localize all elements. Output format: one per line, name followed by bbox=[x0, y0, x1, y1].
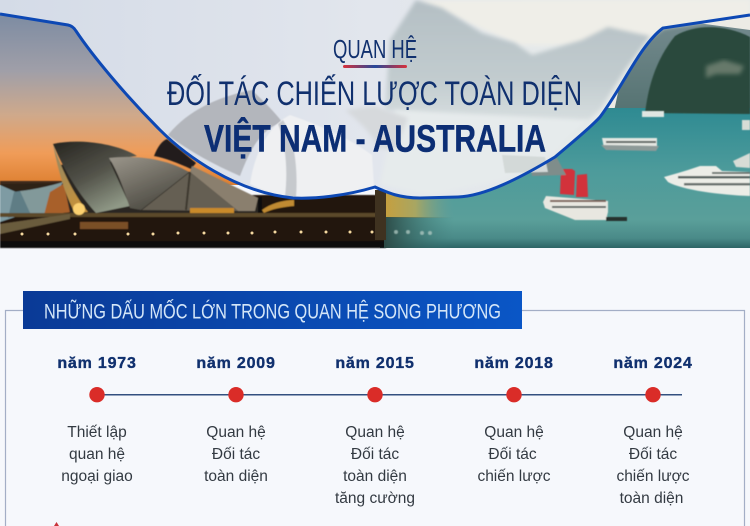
boat: top bbox=[642, 111, 664, 117]
boat: right shore bbox=[742, 120, 750, 130]
photo: pale sky bbox=[0, 0, 750, 130]
milestone 1973: Thiết lập bbox=[67, 424, 127, 441]
milestone 2015: toàn diện bbox=[343, 468, 407, 485]
milestone 2015 bbox=[335, 355, 415, 507]
panel heading bbox=[23, 291, 522, 329]
photo: harbour lights bbox=[20, 230, 374, 236]
milestone 2015: Đối tác bbox=[351, 446, 399, 463]
milestone 2009: Đối tác bbox=[212, 446, 260, 463]
milestone 2009: Quan hệ bbox=[206, 424, 266, 441]
milestone 2024: năm 2024 bbox=[613, 355, 693, 372]
milestone 2024: Quan hệ bbox=[623, 424, 683, 441]
milestone 2018: Quan hệ bbox=[484, 424, 544, 441]
banner photo collage bbox=[0, 0, 750, 248]
blue curve frame bbox=[0, 14, 750, 198]
title line: Việt Nam - Australia: VIỆT NAM - AUSTRALIA bbox=[204, 116, 546, 160]
milestone 2015: Quan hệ bbox=[345, 424, 405, 441]
milestone 2018: năm 2018 bbox=[474, 355, 554, 372]
photo: island cliff bbox=[706, 60, 744, 78]
boat: right cruise bbox=[664, 166, 750, 196]
photo: green island bbox=[645, 27, 750, 114]
bright glazing bbox=[44, 180, 72, 215]
ghost: opera white shells bbox=[250, 115, 374, 197]
title rule bbox=[343, 65, 407, 68]
milestone 2024: chiến lược bbox=[616, 468, 690, 485]
milestone 2018: Đối tác bbox=[488, 446, 537, 463]
milestone 1973 bbox=[57, 355, 137, 485]
photo: golden shoreline bbox=[384, 188, 454, 218]
photo: Sydney Opera House bbox=[0, 139, 386, 248]
ghost: Ha Long mountains bbox=[385, 0, 650, 145]
red marker tip bbox=[54, 522, 59, 526]
milestone 2015: tăng cường bbox=[335, 490, 415, 507]
milestone 2024: toàn diện bbox=[620, 490, 683, 507]
milestone 1973: ngoại giao bbox=[61, 468, 133, 485]
milestone 2018 bbox=[474, 355, 554, 485]
panel: milestones bbox=[6, 291, 744, 526]
ghost: boat on veil bbox=[502, 155, 548, 173]
boats bbox=[530, 111, 750, 221]
panel heading: NHỮNG DẤU MỐC LỚN TRONG QUAN HỆ SONG PHƯƠNG bbox=[44, 300, 501, 324]
boat: far right bbox=[733, 153, 750, 168]
title line: Quan hệ: QUAN HỆ bbox=[333, 34, 417, 64]
photo: water glints bbox=[394, 230, 432, 235]
photo: Sydney sunset sky bbox=[0, 10, 400, 185]
shell backing bbox=[60, 160, 258, 213]
ghost: opera sail bbox=[168, 90, 282, 176]
timeline line bbox=[97, 394, 682, 396]
photo: dark far shore bbox=[384, 217, 454, 248]
milestone 2009: năm 2009 bbox=[196, 355, 276, 372]
photo: Ha Long bay water bbox=[380, 108, 750, 248]
photo: distant mountains right bbox=[610, 20, 750, 130]
title bbox=[167, 34, 582, 160]
milestone 2015: năm 2015 bbox=[335, 355, 415, 372]
ghost: cream sky bbox=[418, 0, 750, 45]
boat: behind frame bbox=[530, 158, 566, 176]
translucent title panel bbox=[0, 0, 750, 198]
milestone 2018: chiến lược bbox=[477, 468, 551, 485]
title line: Đối tác chiến lược toàn diện: ĐỐI TÁC CHIẾN LƯỢC TOÀN DIỆN bbox=[167, 74, 582, 113]
milestone 2009 bbox=[196, 355, 276, 485]
milestone 1973: năm 1973 bbox=[57, 355, 137, 372]
milestone 2024: Đối tác bbox=[629, 446, 677, 463]
ghost: pale haze on water bbox=[380, 110, 590, 195]
milestone 2024 bbox=[613, 355, 693, 507]
milestone 1973: quan hệ bbox=[69, 446, 125, 463]
panel border bbox=[6, 310, 744, 526]
boat: left cruise bbox=[601, 138, 659, 151]
harbour building bbox=[0, 195, 386, 248]
milestone 2009: toàn diện bbox=[204, 468, 268, 485]
photo: shoreline tower bbox=[375, 190, 386, 240]
boat: red sails bbox=[543, 169, 627, 221]
